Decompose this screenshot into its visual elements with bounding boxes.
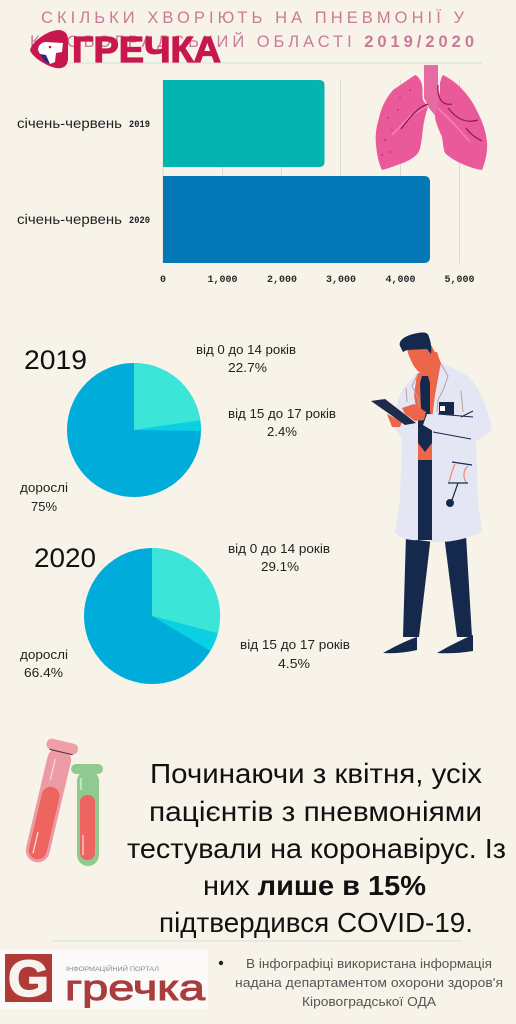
pie chart: 2019 bbox=[67, 363, 201, 497]
row label: 2019: січень-червень bbox=[17, 115, 122, 131]
source note: Кіровоградської ОДА bbox=[302, 994, 436, 1009]
stethoscope bbox=[448, 462, 472, 503]
logo: Гречка portal: гречка bbox=[65, 967, 206, 1008]
pie labels: 2019: 75% bbox=[31, 500, 57, 514]
axis tick labels: 0 bbox=[160, 275, 166, 286]
logo: Гречка portal: ІНФОРМАЦІЙНИЙ ПОРТАЛ bbox=[66, 964, 159, 973]
callout text: coronavirus testing: них лише в 15% bbox=[203, 870, 426, 901]
axis tick labels: 1,000 bbox=[207, 275, 238, 286]
icon: lungs bbox=[376, 65, 487, 170]
title: СКІЛЬКИ ХВОРІЮТЬ НА ПНЕВМОНІЇ У bbox=[41, 9, 465, 27]
pie labels: 2019: від 0 до 14 років bbox=[196, 343, 296, 357]
callout text: coronavirus testing: тестували на коронавірус. Із bbox=[127, 833, 506, 864]
tie bbox=[418, 376, 432, 452]
row label: 2019: 2019 bbox=[129, 120, 150, 131]
heading: 2020: 2020 bbox=[34, 543, 96, 573]
axis tick labels bbox=[160, 275, 475, 286]
title: КІРОВОГРАДСЬКИЙ ОБЛАСТІ 2019/2020 bbox=[30, 32, 474, 51]
collar lines bbox=[406, 364, 463, 412]
hair bbox=[400, 332, 431, 354]
pie labels: 2020: 29.1% bbox=[261, 560, 299, 574]
axis tick labels: 3,000 bbox=[326, 275, 356, 286]
green tube bbox=[77, 770, 99, 866]
callout text: coronavirus testing: Починаючи з квітня, усіх bbox=[150, 758, 482, 789]
icon: test tubes bbox=[19, 738, 103, 866]
axis tick labels: 4,000 bbox=[385, 275, 416, 286]
logo: Гречка portal: G bbox=[8, 950, 49, 1007]
pie labels: 2020: 4.5% bbox=[278, 657, 310, 671]
hands bbox=[402, 404, 426, 421]
pie labels: 2019: дорослі bbox=[20, 481, 68, 495]
pie labels: 2019: 2.4% bbox=[267, 425, 297, 439]
arm sleeve bbox=[423, 413, 491, 440]
pink tube bbox=[19, 738, 79, 866]
logo: Гречка overlay: ГРЕЧКА bbox=[72, 29, 221, 70]
axis tick labels: 5,000 bbox=[444, 275, 475, 286]
axis tick labels: 2,000 bbox=[267, 275, 297, 286]
callout text: coronavirus testing: підтвердився COVID-19. bbox=[159, 907, 473, 938]
coat bbox=[393, 362, 491, 542]
row label: 2020: 2020 bbox=[129, 216, 150, 227]
bar: 2020 bbox=[163, 176, 430, 263]
pie labels: 2020: 66.4% bbox=[24, 666, 63, 680]
badge bbox=[439, 402, 454, 415]
bar: 2019 bbox=[163, 80, 324, 167]
bar chart: cases January-June bbox=[17, 80, 475, 286]
pie labels: 2020: від 15 до 17 років bbox=[240, 638, 350, 652]
pie labels: 2019: від 15 до 17 років bbox=[228, 407, 336, 421]
pie labels: 2019 bbox=[20, 343, 336, 514]
heading: 2019: 2019 bbox=[24, 345, 87, 375]
tablet bbox=[371, 399, 416, 425]
legs bbox=[403, 535, 431, 637]
pie labels: 2019: 22.7% bbox=[228, 361, 267, 375]
pie labels: 2020: від 0 до 14 років bbox=[228, 542, 330, 556]
source note: В інфографіці використана інформація bbox=[246, 956, 492, 971]
pie labels: 2020 bbox=[20, 542, 350, 680]
shirt bbox=[414, 362, 441, 460]
neck and face bbox=[421, 352, 441, 374]
trouser strip bbox=[418, 460, 432, 540]
row label: 2020: січень-червень bbox=[17, 211, 122, 227]
callout text: coronavirus testing: пацієнтів з пневмоніями bbox=[149, 796, 482, 827]
pie chart: 2020 bbox=[84, 548, 220, 684]
callout text: coronavirus testing bbox=[127, 758, 506, 938]
source note bbox=[219, 956, 503, 1009]
source note: надана департаментом охорони здоров'я bbox=[235, 975, 503, 990]
pie labels: 2020: дорослі bbox=[20, 648, 68, 662]
shoes bbox=[383, 637, 417, 653]
title bbox=[30, 9, 474, 51]
logo: Гречка portal bbox=[0, 950, 208, 1009]
icon: doctor bbox=[371, 332, 491, 653]
